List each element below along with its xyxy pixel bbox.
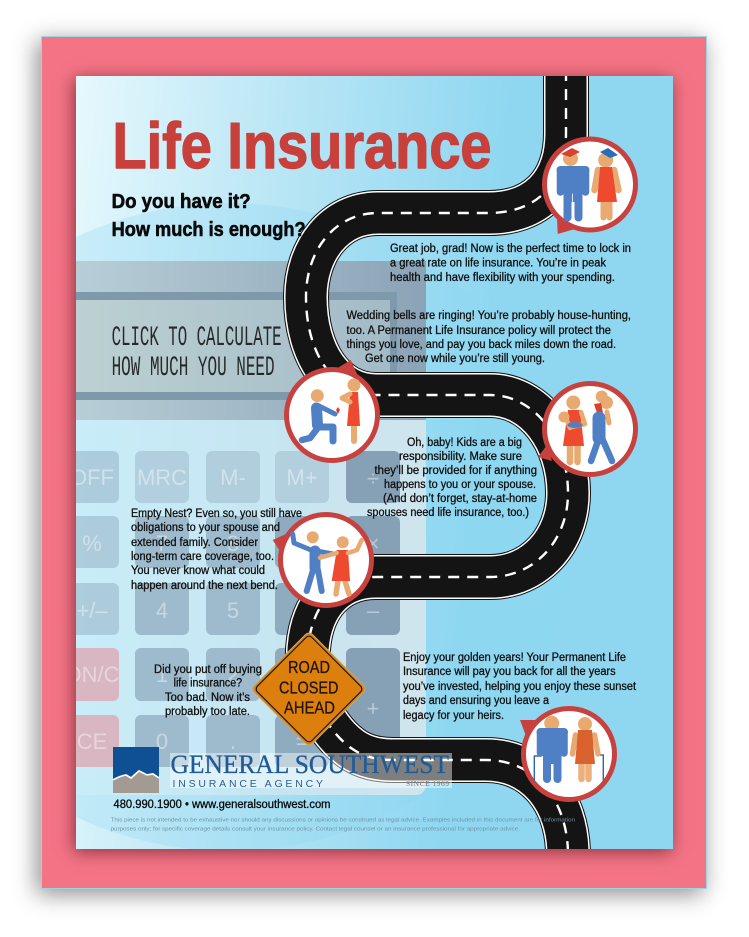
- icon: proposal: [286, 360, 378, 460]
- icon: seniors: [520, 708, 614, 800]
- text: baby: spouses need life insurance, too.): [367, 507, 529, 519]
- calculator key labels: =: [296, 729, 308, 754]
- text: golden years: [403, 652, 637, 722]
- text: wedding: [346, 310, 631, 365]
- calculator key labels: ÷: [367, 466, 379, 491]
- calculator key labels: 3: [296, 662, 308, 687]
- text: baby: they’ll be provided for if anything: [374, 465, 537, 477]
- text: golden years: Insurance will pay you back for all the years: [403, 666, 616, 678]
- text: empty nest: Empty Nest? Even so, you still have: [131, 508, 302, 520]
- text: empty nest: long-term care coverage, too.: [131, 551, 274, 563]
- text: empty nest: obligations to your spouse and: [131, 522, 280, 534]
- text: baby: Oh, baby! Kids are a big: [407, 437, 522, 449]
- text: graduation: Great job, grad! Now is the perfect time to lock in: [390, 243, 631, 255]
- text: put off buying: Did you put off buying: [154, 664, 262, 676]
- text: put off buying: [154, 664, 262, 718]
- icon: empty nesters: [273, 514, 372, 606]
- calculator key labels: CE: [77, 729, 107, 754]
- calculator key labels: M+: [286, 465, 318, 490]
- calculator background: [64, 261, 426, 795]
- disclaimer: [110, 818, 575, 833]
- calculator key labels: M-: [220, 465, 246, 490]
- calculator key labels: MRC: [137, 465, 187, 490]
- text: golden years: you’ve invested, helping you enjoy these sunset: [403, 681, 637, 693]
- calculator display text: [112, 323, 282, 384]
- text: empty nest: extended family. Consider: [131, 537, 258, 549]
- contact line: 480.990.1900 • www.generalsouthwest.com: [114, 799, 330, 811]
- title: Life Insurance: [112, 109, 492, 182]
- icon: parents with babies: [538, 384, 636, 474]
- infographic artwork: [76, 76, 638, 849]
- winding road: [306, 70, 568, 855]
- subtitle: Do you have it?: [112, 191, 251, 213]
- text: put off buying: life insurance?: [174, 678, 242, 690]
- text: golden years: legacy for your heirs.: [403, 710, 504, 722]
- text: empty nest: [131, 508, 302, 592]
- road closed sign: AHEAD: [284, 698, 335, 718]
- calculator key labels: 6: [296, 598, 308, 623]
- text: golden years: Enjoy your golden years! Your Permanent Life: [403, 652, 626, 664]
- logo: General Southwest: [113, 747, 452, 793]
- calculator key labels: 9: [296, 531, 308, 556]
- page background: [76, 76, 673, 849]
- calculator key labels: –: [367, 598, 380, 623]
- page gradient panel: [76, 76, 469, 849]
- calculator key labels: ×: [367, 531, 379, 556]
- calculator key labels: 8: [227, 531, 239, 556]
- road closed sign: CLOSED: [279, 678, 338, 698]
- text: baby: happens to you or your spouse.: [384, 479, 536, 491]
- calculator display text: HOW MUCH YOU NEED: [112, 353, 275, 384]
- calculator key labels: +: [367, 696, 379, 721]
- calculator key labels: 1: [156, 662, 168, 687]
- calculator key labels: 5: [227, 598, 239, 623]
- calculator key labels: ON/C: [64, 662, 120, 687]
- text: baby: (And don’t forget, stay-at-home: [383, 493, 537, 505]
- logo: General Southwest: SINCE 1969: [406, 779, 449, 788]
- calculator display text: CLICK TO CALCULATE: [112, 323, 282, 354]
- calculator key labels: OFF: [70, 465, 114, 490]
- road closed sign: ROAD: [288, 657, 330, 677]
- text: golden years: days and ensuring you leave a: [403, 695, 550, 707]
- text: graduation: [390, 243, 631, 284]
- calculator key labels: 4: [156, 598, 168, 623]
- icon: graduates: [544, 139, 636, 234]
- text: wedding: Get one now while you’re still young.: [365, 353, 545, 365]
- text: empty nest: happen around the next bend.: [131, 580, 278, 592]
- disclaimer: This piece is not intended to be exhaustive nor should any discussions or opinions be construed as legal advice. Examples included in this document are for information: [110, 818, 575, 824]
- text: wedding: things you love, and pay you back miles down the road.: [346, 339, 616, 351]
- text: empty nest: You never know what could: [131, 565, 265, 577]
- subtitle: [112, 191, 306, 241]
- text: put off buying: probably too late.: [165, 706, 250, 718]
- calculator key labels: +/–: [76, 598, 108, 623]
- logo: General Southwest: INSURANCE AGENCY: [172, 778, 323, 790]
- text: baby: [367, 437, 537, 519]
- text: baby: responsibility. Make sure: [399, 451, 522, 463]
- subtitle: How much is enough?: [112, 219, 306, 241]
- calculator key labels: 0: [156, 729, 168, 754]
- calculator key labels: [64, 465, 380, 754]
- calculator key labels: 2: [227, 662, 239, 687]
- calculator keys: [66, 451, 400, 767]
- calculator key labels: %: [82, 531, 102, 556]
- text: graduation: a great rate on life insurance. You’re in peak: [390, 258, 606, 270]
- text: put off buying: Too bad. Now it’s: [165, 692, 250, 704]
- text: wedding: too. A Permanent Life Insurance policy will protect the: [346, 325, 611, 337]
- calculator key labels: 7: [156, 531, 168, 556]
- calculator key labels: .: [230, 729, 236, 754]
- text: graduation: health and have flexibility with your spending.: [390, 272, 615, 284]
- logo: General Southwest: GENERAL SOUTHWEST: [170, 749, 449, 779]
- text: wedding: Wedding bells are ringing! You’re probably house-hunting,: [346, 310, 631, 322]
- road closed sign: [251, 631, 367, 747]
- disclaimer: purposes only; for specific coverage details consult your insurance policy. Contact legal counsel or an insurance professional for appropriate advice.: [110, 827, 520, 833]
